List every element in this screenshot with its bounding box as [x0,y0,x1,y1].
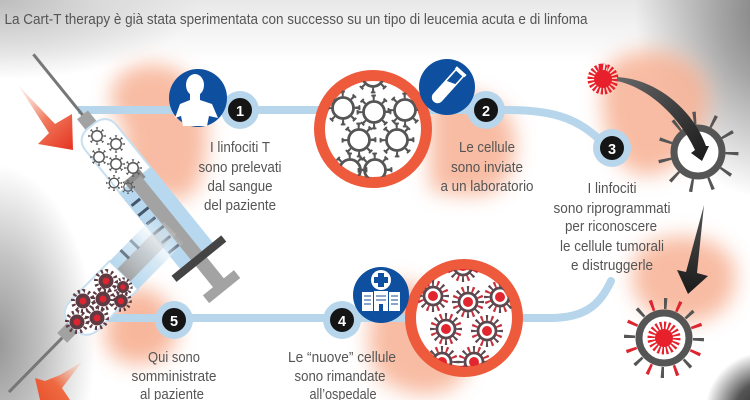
syringe: infusion [0,214,184,400]
text: step 3: e distruggerle [571,258,653,274]
icon: patient [169,69,227,127]
text: step 3 [554,181,670,274]
step 1 badge [221,91,259,129]
text: step 1: I linfociti T [210,140,270,156]
step 4 badge [323,301,361,339]
icon: test tube [419,59,475,115]
text: step 3: le cellule tumorali [560,239,664,255]
syringe: withdrawal [9,34,250,311]
text: step 2: sono inviate [451,160,523,176]
text: step 2: a un laboratorio [440,179,534,195]
text: step 5: somministrate [132,369,216,385]
T cell attacking tumour cell [630,304,698,372]
text: step 5: Qui sono [148,350,200,366]
step 1 badge: 1 [236,104,244,120]
text: step 2 [440,140,534,195]
syringe cells: T lymphocytes [89,128,141,194]
text: step 4: Le “nuove” cellule [288,350,396,366]
text: step 1: dal sangue [208,179,272,195]
syringe cells: modified cells [67,271,131,332]
text: step 3: per riconoscere [565,219,657,235]
icon: hospital [353,267,409,323]
big circle: T cells [320,60,426,186]
peach blob: lower right background [632,236,736,322]
step 4 badge: 4 [338,314,346,330]
text: step 2: Le cellule [459,140,515,156]
text: step 3: I linfociti [588,181,636,197]
step 5 badge [155,301,193,339]
connector: bottom path [110,281,611,318]
step 3 badge: 3 [608,142,616,158]
peach blob: step 4 background [369,282,471,394]
big circle: modified cells [410,253,518,375]
step 5 badge: 5 [170,314,178,330]
text: step 4: sono rimandate [294,369,386,385]
text: step 1: sono prelevati [198,160,282,176]
peach blob: step 5 background [105,288,177,364]
text: step 1 [198,140,282,214]
T cell: top right [664,118,732,186]
step 2 badge [467,91,505,129]
connector: top path [78,110,600,140]
peach blob: step 2 background [430,92,515,195]
step 2 badge: 2 [482,104,490,120]
text: step 4 [288,350,396,400]
curved black arrow [617,77,709,161]
peach blob: step 3 background [602,50,709,175]
text: step 1: del paziente [204,198,276,214]
text: step 5 [132,350,216,400]
straight black arrow [677,205,708,294]
text: step 3: sono riprogrammati [554,201,670,217]
red arrow: into syringe [18,85,73,150]
title: La Cart-T therapy è già stata sperimentata con successo su un tipo di leucemia acuta e di linfoma [4,12,588,28]
step 3 badge [593,129,631,167]
red tumour cell [592,68,614,90]
red arrow: out of syringe [35,362,82,400]
peach blob: step 1 background [111,64,207,199]
